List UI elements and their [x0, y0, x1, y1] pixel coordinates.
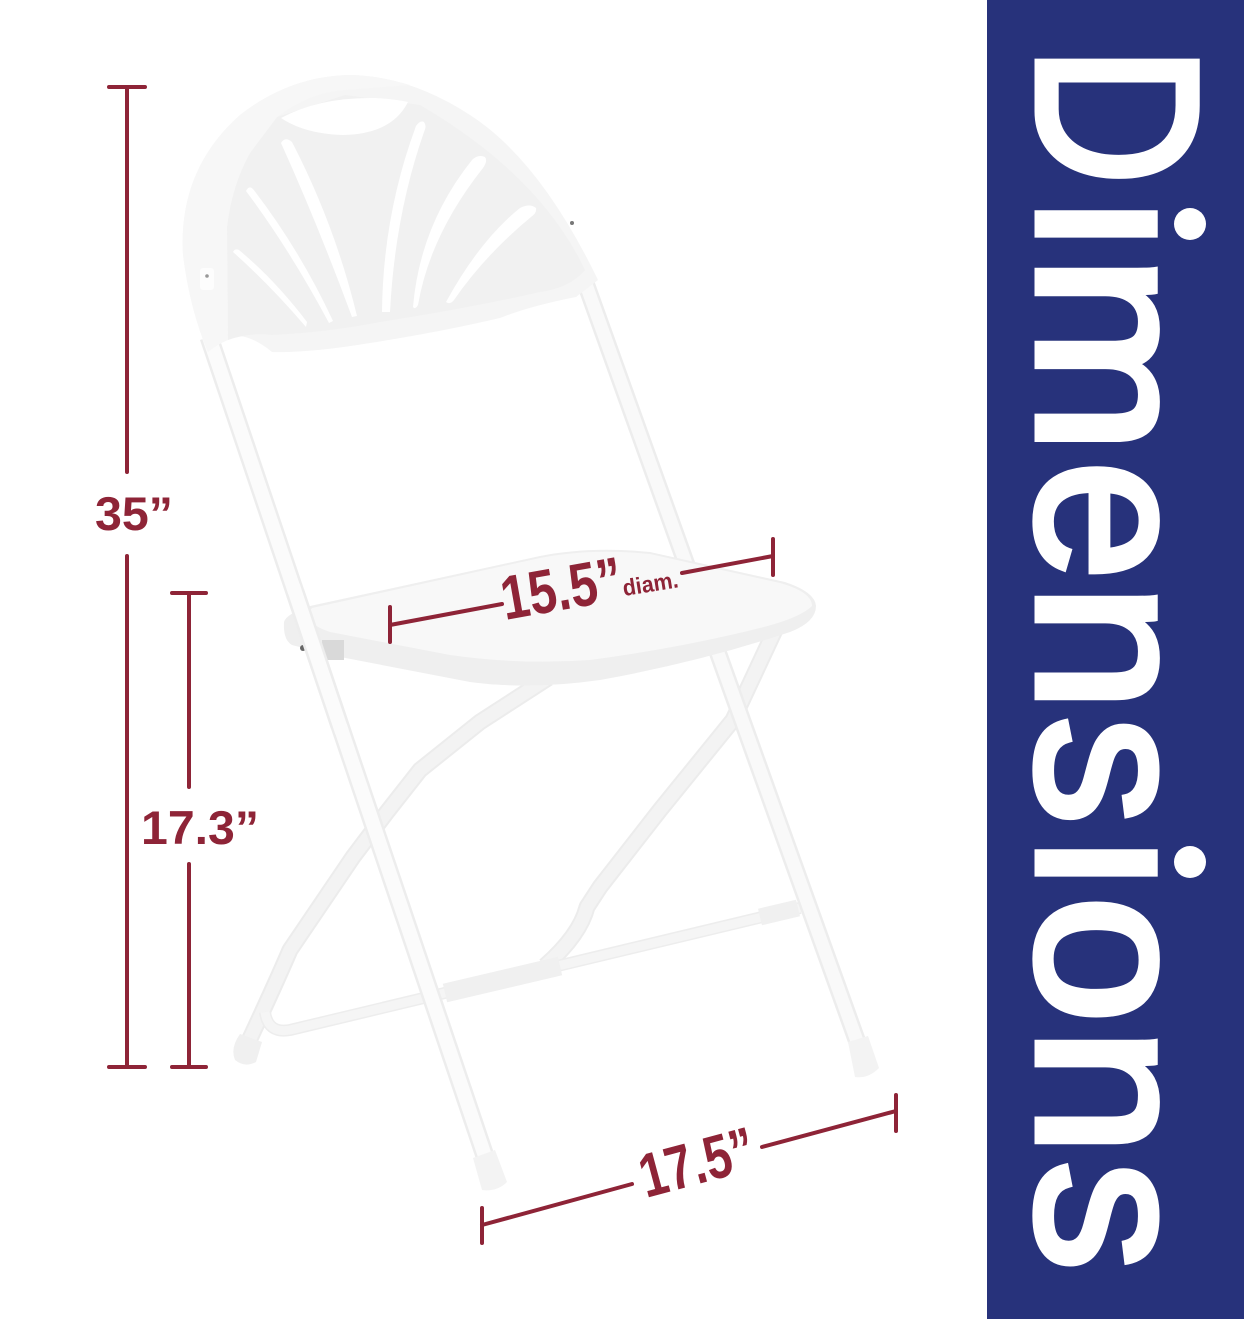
dimension: overall height 35 inches — [95, 87, 173, 1067]
dimension: seat diameter 15.5 inches — [390, 539, 773, 642]
seat — [284, 550, 816, 686]
title: Dimensions: s — [991, 716, 1237, 824]
title: Dimensions — [989, 46, 1244, 1271]
left front leg — [209, 337, 488, 1165]
title: Dimensions: i — [991, 838, 1237, 888]
panel: dimensions sidebar — [987, 0, 1244, 1319]
dimension: base width 17.5 inches: 17.5” — [632, 1115, 763, 1212]
title: Dimensions: n — [991, 584, 1237, 712]
dimension: overall height 35 inches: 35” — [95, 487, 173, 540]
title: Dimensions: o — [991, 896, 1237, 1024]
foot bar — [265, 908, 800, 1031]
title: Dimensions: n — [991, 1028, 1237, 1156]
rear foot cap — [233, 1034, 262, 1065]
seat rivet — [300, 645, 306, 651]
illustration: white folding chair — [183, 75, 879, 1190]
handle opening — [281, 98, 408, 135]
backrest rivets — [200, 221, 574, 290]
right front leg — [583, 276, 862, 1055]
title: Dimensions: D — [989, 46, 1244, 185]
dimension: base width 17.5 inches — [482, 1095, 896, 1243]
fan slots — [233, 122, 536, 327]
rear cross legs — [247, 630, 775, 1045]
title: Dimensions: m — [991, 255, 1237, 454]
left foot cap — [473, 1150, 507, 1190]
left leg over seat edge — [293, 586, 342, 732]
dimension: seat diameter 15.5 inches: 15.5” — [495, 545, 628, 634]
right foot cap — [848, 1036, 879, 1077]
title: Dimensions: e — [991, 460, 1237, 580]
dimension: seat diameter 15.5 inches: diam. — [621, 566, 680, 601]
dimension: seat height 17.3 inches: 17.3” — [141, 801, 259, 854]
title: Dimensions: s — [991, 1161, 1237, 1271]
title: Dimensions: i — [991, 198, 1237, 250]
seat hinge — [322, 640, 344, 660]
backrest — [183, 75, 598, 352]
dimension: seat height 17.3 inches — [141, 593, 259, 1067]
